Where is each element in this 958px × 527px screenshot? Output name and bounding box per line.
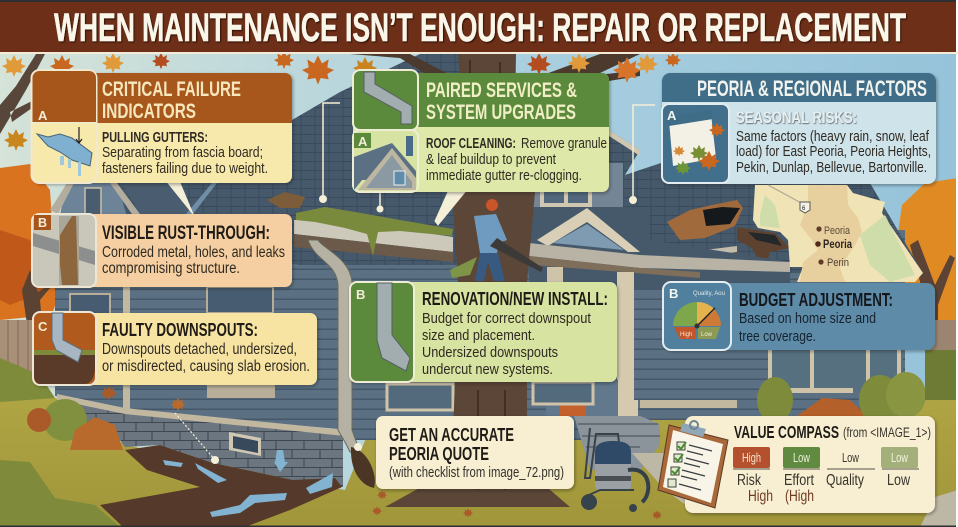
icon: budget gauge: Low: [701, 332, 713, 338]
chip row: [733, 447, 919, 469]
text: budget adjustment: BUDGET ADJUSTMENT:: [739, 290, 893, 310]
icon: budget gauge: B: [669, 286, 678, 301]
roofs: [50, 54, 923, 273]
eroded mud and water: [100, 445, 342, 527]
icon: budget gauge: High: [680, 332, 692, 338]
panel: get an accurate quote: PEORIA QUOTE: [389, 444, 489, 464]
left orange tree: [0, 54, 60, 345]
labels: Effort: [784, 472, 815, 489]
panel: get an accurate quote: GET AN ACCURATE: [389, 425, 514, 445]
text: budget adjustment: Based on home size and: [739, 310, 876, 327]
chip row: Low: [842, 450, 859, 465]
icon: clipboard checklist: [658, 421, 728, 508]
ground lawn: [0, 395, 958, 527]
text: faulty downspouts: or misdirected, causing slab erosion.: [102, 358, 310, 375]
labels: Low: [887, 472, 911, 489]
text: rust-through: [102, 222, 285, 277]
text: roof cleaning: Remove granule: [521, 136, 607, 152]
icon: rusted gutter: B: [38, 216, 47, 230]
icon: faulty downspout: [33, 312, 96, 385]
text: roof cleaning: immediate gutter re-clogging.: [426, 168, 582, 184]
chip row: High: [742, 450, 761, 465]
right orange tree: [897, 178, 958, 370]
icon: straight downspout: [350, 282, 414, 382]
heading: paired services: PAIRED SERVICES &: [426, 79, 577, 102]
text: faulty downspouts: [102, 319, 310, 375]
house walls: [55, 230, 905, 440]
text: renovation: [422, 289, 608, 378]
labels: Risk: [737, 472, 761, 489]
heading: critical failure: CRITICAL FAILURE: [102, 78, 241, 101]
stone foundation: [57, 398, 343, 487]
panel: get an accurate quote: (with checklist from image_72.png): [389, 465, 564, 481]
text: seasonal risks: SEASONAL RISKS:: [736, 108, 857, 127]
icon: pulling gutter: A: [38, 108, 48, 123]
text: renovation: RENOVATION/NEW INSTALL:: [422, 289, 608, 309]
map: Peoria region: 6: [802, 206, 806, 212]
text: renovation: undercut new systems.: [422, 361, 553, 378]
labels: High: [748, 488, 773, 505]
text: renovation: Budget for correct downspout: [422, 310, 592, 327]
panel: critical failure indicators: [32, 70, 292, 183]
icon: roof cleaning: [353, 130, 418, 192]
front left bushes: [0, 350, 958, 527]
heading: value compass: (from <IMAGE_1>): [843, 425, 931, 440]
sidewalk: [632, 453, 958, 527]
map: Peoria region: Perin: [827, 257, 849, 269]
map: Peoria region: Peoria: [823, 237, 852, 251]
text: pulling gutters: fasteners failing due to weight.: [102, 160, 268, 177]
icon: budget gauge: Quality, Aou: [693, 291, 725, 297]
text: roof cleaning: & leaf buildup to prevent: [426, 152, 556, 168]
gutter along main roof: [294, 220, 453, 262]
roof damage: hole in shingles: [640, 200, 790, 273]
text: seasonal risks: [736, 108, 931, 176]
icon: rusted gutter: [32, 214, 96, 287]
panel: Peoria and regional factors: [662, 73, 936, 184]
icon: faulty downspout: C: [38, 319, 48, 334]
icon: straight downspout: B: [356, 287, 365, 302]
upper branches: [350, 54, 640, 112]
icon: budget gauge: [663, 282, 731, 350]
labels: [737, 472, 911, 505]
panel: get an accurate quote: [376, 416, 574, 489]
panel: renovation / new install: [349, 282, 617, 382]
icon: calendar with leaves: A: [667, 108, 677, 123]
labels: Quality: [826, 472, 864, 489]
porch columns and steps: [546, 267, 660, 470]
connector lines and dots: [168, 103, 655, 464]
heading: critical failure: [102, 78, 241, 123]
text: rust-through: Corroded metal, holes, and leaks: [102, 244, 285, 261]
heading: value compass: VALUE COMPASS: [734, 422, 839, 442]
icon: downspout elbow: [353, 70, 418, 130]
back fences: [0, 320, 958, 380]
text: budget adjustment: [739, 290, 893, 345]
text: renovation: size and placement.: [422, 327, 535, 344]
icon: roof cleaning: A: [358, 134, 368, 149]
panel: faulty downspouts: [33, 312, 317, 385]
chip row: Low: [793, 450, 810, 465]
panel: visible rust-through: [32, 214, 292, 287]
title banner: [0, 0, 958, 54]
basement window: [229, 432, 261, 456]
icon: shop vacuum: [581, 428, 648, 512]
text: roof cleaning: ROOF CLEANING:: [426, 136, 516, 152]
text: renovation: Undersized downspouts: [422, 344, 558, 361]
panel: paired services: [353, 70, 609, 192]
text: budget adjustment: tree coverage.: [739, 328, 816, 345]
text: rust-through: VISIBLE RUST-THROUGH:: [102, 222, 270, 244]
text: pulling gutters: [102, 130, 268, 177]
text: roof cleaning: [426, 136, 607, 184]
heading: paired services: [426, 79, 577, 124]
text: faulty downspouts: FAULTY DOWNSPOUTS:: [102, 319, 258, 340]
icon: calendar with leaves: [662, 104, 729, 183]
tree trunk: [385, 54, 570, 507]
scattered leaves: [2, 51, 681, 520]
upper right wall and window: [520, 125, 640, 225]
labels: (High: [785, 488, 814, 505]
heading: critical failure: INDICATORS: [102, 100, 196, 123]
heading: paired services: SYSTEM UPGRADES: [426, 101, 576, 124]
panel: budget adjustment: [663, 282, 935, 350]
worker with leaf blower: [450, 199, 543, 281]
map: Peoria region: [753, 185, 923, 282]
main windows: [70, 287, 903, 412]
text: rust-through: compromising structure.: [102, 260, 240, 277]
text: pulling gutters: PULLING GUTTERS:: [102, 130, 208, 146]
chip row: Low: [891, 450, 908, 465]
moss on gutter: [296, 207, 453, 256]
downspout at house corner: [308, 240, 375, 488]
text: faulty downspouts: Downspouts detached, undersized,: [102, 341, 297, 358]
text: pulling gutters: Separating from fascia board;: [102, 144, 263, 161]
map: Peoria region: Peoria: [824, 225, 851, 237]
porch roof and gable: [520, 207, 790, 290]
panel: value compass: [685, 416, 935, 513]
icon: pulling gutter: [32, 70, 96, 183]
